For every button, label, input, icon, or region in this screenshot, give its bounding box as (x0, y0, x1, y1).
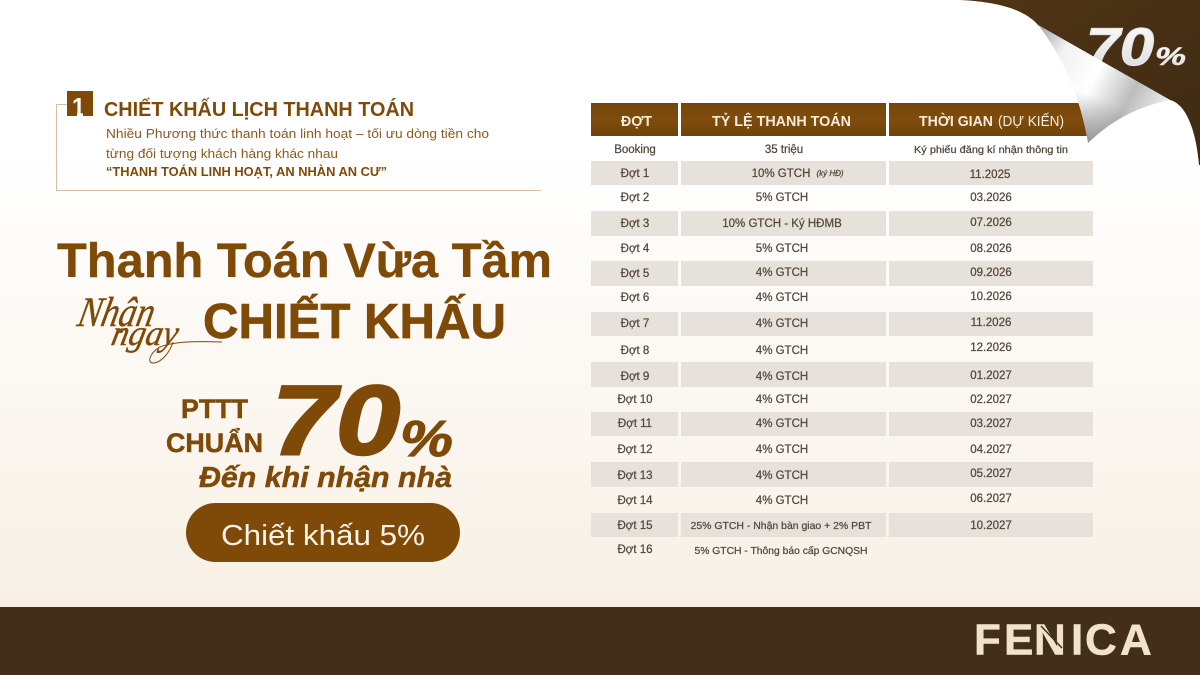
FENICA logo: FENICA (974, 616, 1152, 664)
column: payment rate (690, 144, 872, 557)
table header: (DỰ KIẾN) (998, 113, 1064, 130)
column: time: 11.2026 (971, 317, 1011, 329)
script text: nhận ngay (73, 289, 222, 363)
discount pill (186, 503, 460, 562)
column: payment rate: 5% GTCH - Thông báo cấp GCNQSH (694, 545, 868, 557)
column: dot: Đợt 14 (617, 495, 653, 507)
section heading block (56, 91, 541, 190)
table header: TỶ LỆ THANH TOÁN (712, 112, 851, 130)
column: dot (614, 144, 656, 556)
frame line (56, 104, 541, 190)
column: payment rate: 10% GTCH (752, 168, 810, 180)
column: time: 10.2027 (970, 520, 1012, 532)
column: dot: Đợt 9 (621, 371, 649, 383)
column: payment rate: 4% GTCH (756, 418, 808, 430)
percent sign: % (400, 410, 453, 467)
table header: ĐỢT (621, 113, 652, 130)
column: payment rate: 4% GTCH (756, 267, 808, 279)
shaded rows (591, 161, 1093, 537)
column: time (914, 144, 1068, 532)
column: time: 03.2027 (970, 418, 1012, 430)
dark corner (960, 0, 1200, 165)
column: dot: Đợt 4 (621, 243, 650, 255)
script text: nhận ngay: Nhận (73, 289, 160, 336)
column: dot: Đợt 16 (617, 544, 653, 556)
section title: CHIẾT KHẤU LỊCH THANH TOÁN (104, 98, 414, 121)
column: dot: Đợt 13 (617, 470, 653, 482)
column: time: 02.2027 (970, 394, 1012, 406)
column: payment rate: 4% GTCH (756, 292, 808, 304)
script text: nhận ngay: ngay (108, 313, 184, 353)
column: dot: Đợt 1 (621, 168, 649, 180)
column: time: 11.2025 (970, 169, 1010, 181)
number badge (67, 91, 93, 122)
discount pill: Chiết khấu 5% (221, 520, 425, 552)
column: dot: Đợt 11 (618, 418, 652, 430)
headline line 1: Thanh Toán Vừa Tầm (57, 235, 552, 288)
column: time: 05.2027 (970, 468, 1012, 480)
column: payment rate: 5% GTCH (756, 243, 808, 255)
footer bar (0, 607, 1200, 675)
payment schedule table (591, 103, 1093, 557)
column: time: 06.2027 (970, 493, 1012, 505)
column: payment rate: 4% GTCH (756, 318, 808, 330)
column: dot: Đợt 7 (621, 318, 649, 330)
PTTT chuan label (166, 394, 263, 458)
table header (591, 103, 1093, 136)
column: time: 08.2026 (970, 243, 1012, 255)
PTTT chuan label: CHUẨN (166, 427, 263, 458)
column: time: 10.2026 (970, 291, 1012, 303)
number badge: 1 (72, 92, 85, 122)
column: dot: Đợt 15 (617, 520, 653, 532)
table header: THỜI GIAN (919, 112, 993, 130)
column: time: Ký phiếu đăng kí nhận thông tin (914, 144, 1068, 156)
section description (106, 126, 489, 179)
column: time: 04.2027 (970, 444, 1012, 456)
column: dot: Đợt 8 (621, 345, 649, 357)
section description: từng đối tượng khách hàng khác nhau (106, 146, 338, 161)
column: time: 12.2026 (970, 342, 1012, 354)
column: dot: Đợt 10 (617, 394, 653, 406)
70 percent offer (166, 365, 453, 494)
column: payment rate: 5% GTCH (756, 192, 808, 204)
until handover: Đến khi nhận nhà (199, 462, 452, 494)
column: dot: Booking (614, 144, 656, 156)
column: dot: Đợt 5 (621, 268, 649, 280)
page curl corner (960, 0, 1200, 165)
column: payment rate: 4% GTCH (756, 495, 808, 507)
main headline (57, 235, 552, 363)
column: payment rate: 4% GTCH (756, 371, 808, 383)
section description: “THANH TOÁN LINH HOẠT, AN NHÀN AN CƯ” (106, 164, 387, 179)
column: dot: Đợt 3 (621, 218, 649, 230)
column: payment rate: (ký HĐ) (816, 169, 844, 178)
section description: Nhiều Phương thức thanh toán linh hoạt – tối ưu dòng tiền cho (106, 126, 489, 141)
column: payment rate: 35 triệu (765, 144, 803, 156)
column: payment rate: 4% GTCH (756, 444, 808, 456)
curled page fold (1038, 25, 1170, 143)
corner number 70 percent (1086, 18, 1186, 77)
column: dot: Đợt 6 (621, 292, 649, 304)
column: time: 01.2027 (970, 370, 1012, 382)
headline line 2: CHIẾT KHẤU (203, 295, 506, 349)
column: payment rate: 10% GTCH - Ký HĐMB (722, 218, 842, 230)
column: dot: Đợt 2 (621, 192, 649, 204)
corner number 70 percent: % (1155, 43, 1186, 71)
column: payment rate: 4% GTCH (756, 470, 808, 482)
column: payment rate: 4% GTCH (756, 345, 808, 357)
PTTT chuan label: PTTT (181, 394, 248, 424)
big 70: 70 (272, 365, 400, 475)
column: time: 07.2026 (970, 217, 1012, 229)
column: dot: Đợt 12 (617, 444, 653, 456)
corner number 70 percent: 70 (1086, 18, 1154, 77)
column: time: 03.2026 (970, 192, 1012, 204)
column: time: 09.2026 (970, 267, 1012, 279)
column: payment rate: 25% GTCH - Nhận bàn giao + 2% PBT (690, 520, 872, 532)
column: payment rate: 4% GTCH (756, 394, 808, 406)
